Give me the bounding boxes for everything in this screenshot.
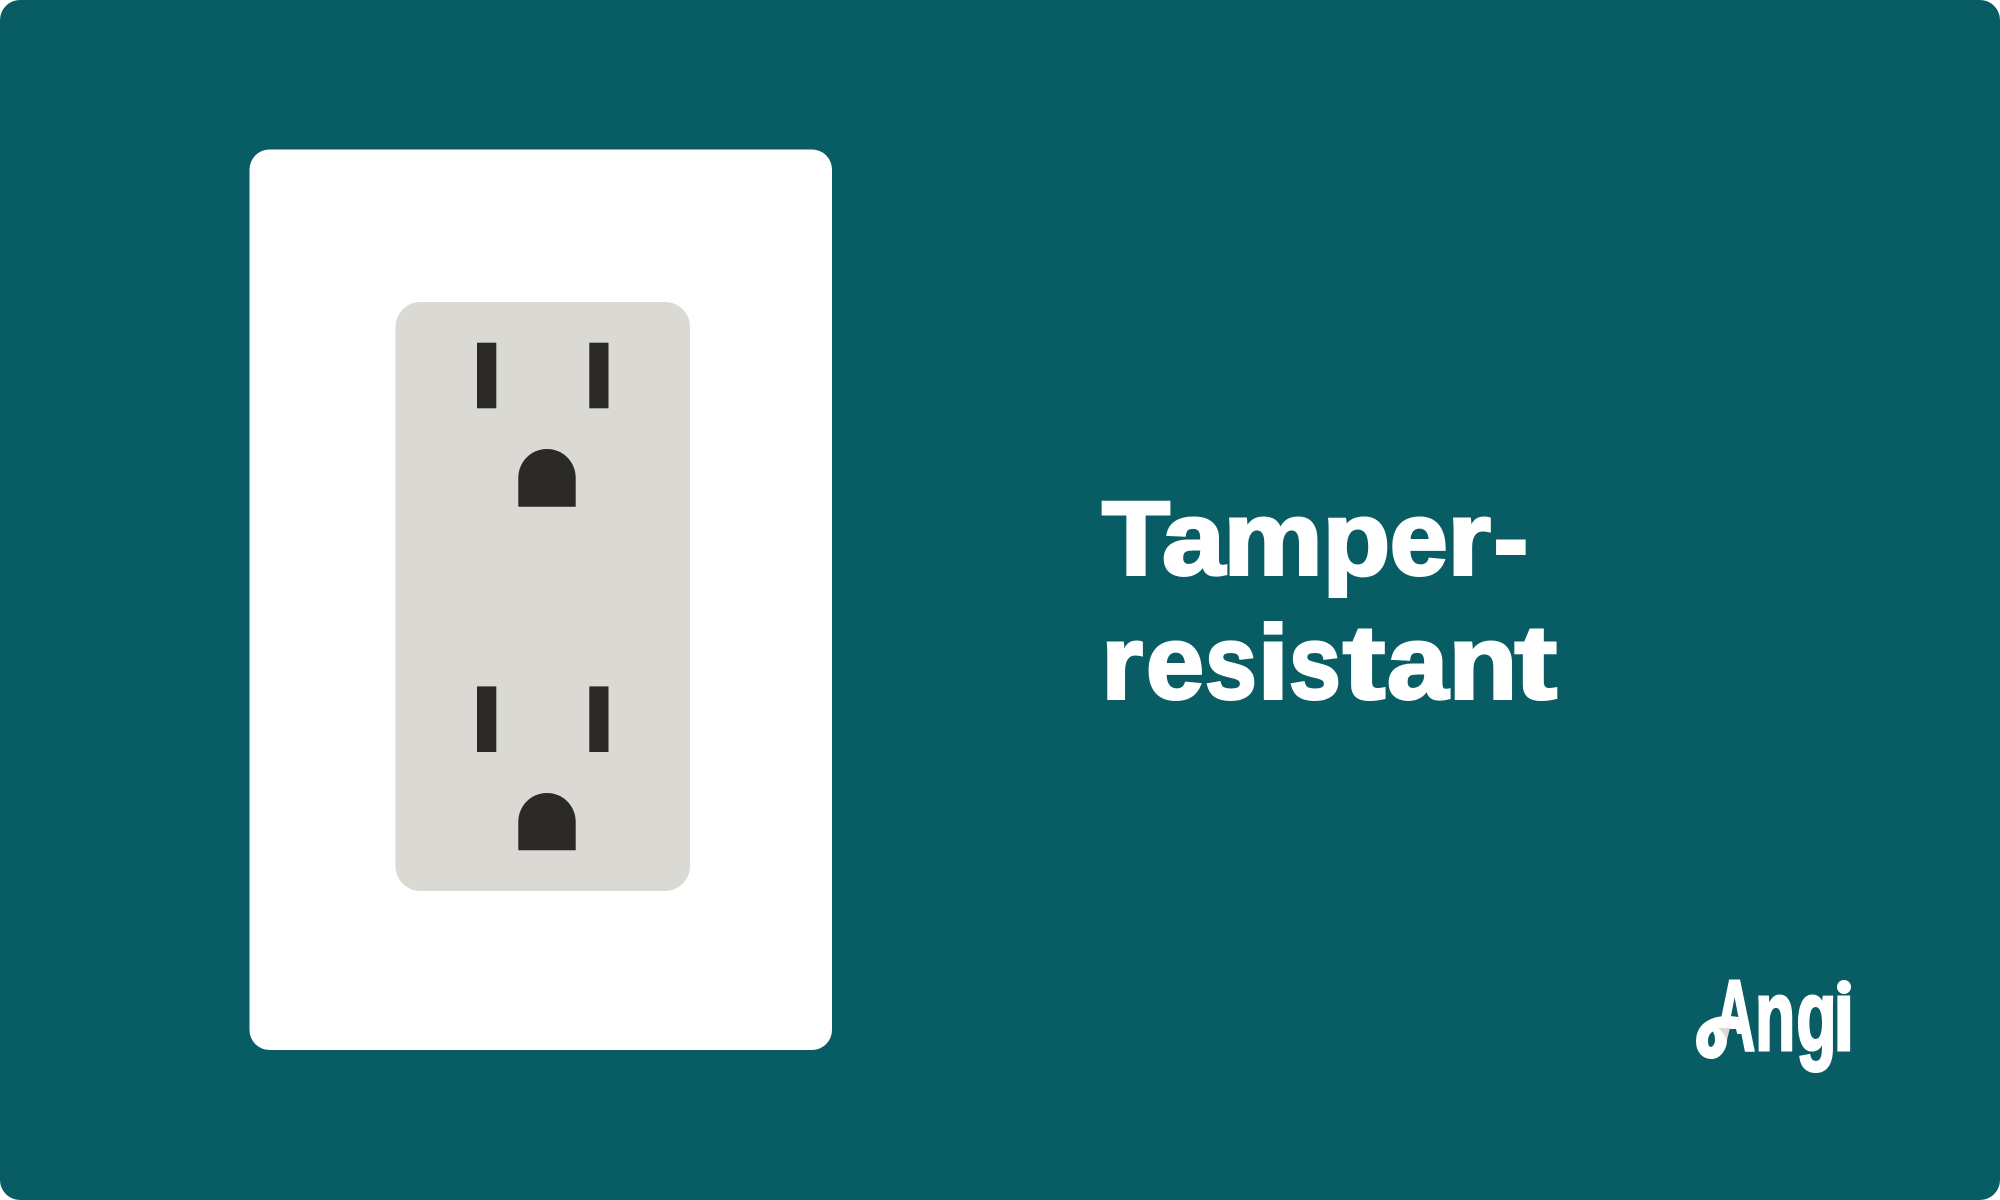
title: [1101, 480, 1557, 722]
title line 1: e: [1390, 480, 1448, 598]
bottom receptacle: [477, 686, 608, 850]
title line 2: i: [1258, 604, 1289, 722]
title line 1: -: [1494, 480, 1528, 598]
title line 2: r: [1101, 604, 1143, 722]
title line 2: a: [1387, 604, 1450, 722]
logo wordmark: i: [1833, 960, 1854, 1072]
title line 2: s: [1289, 604, 1341, 722]
top receptacle: [477, 343, 608, 507]
logo: Angi: [1696, 980, 1851, 1073]
title line 2: n: [1448, 604, 1517, 722]
title line 2: t: [1515, 604, 1557, 722]
logo wordmark: A: [1714, 960, 1755, 1072]
logo i dot: [1837, 980, 1851, 994]
title line 1: T: [1102, 480, 1170, 598]
logo wordmark: [1722, 980, 1850, 1073]
logo wordmark: g: [1796, 960, 1837, 1072]
logo wordmark: n: [1755, 960, 1795, 1072]
title line 1: a: [1162, 480, 1227, 598]
logo loop swoosh: [1702, 1022, 1738, 1053]
title line 2: e: [1146, 604, 1204, 722]
title line 1: p: [1322, 480, 1390, 598]
logo loop fold: [1718, 1028, 1730, 1040]
outlet face: [396, 302, 690, 891]
title line 1: r: [1447, 480, 1491, 598]
outlet wall plate: [250, 150, 832, 1050]
title line 2: s: [1205, 604, 1257, 722]
title line 2: t: [1343, 604, 1385, 722]
title line 1: m: [1223, 480, 1323, 598]
